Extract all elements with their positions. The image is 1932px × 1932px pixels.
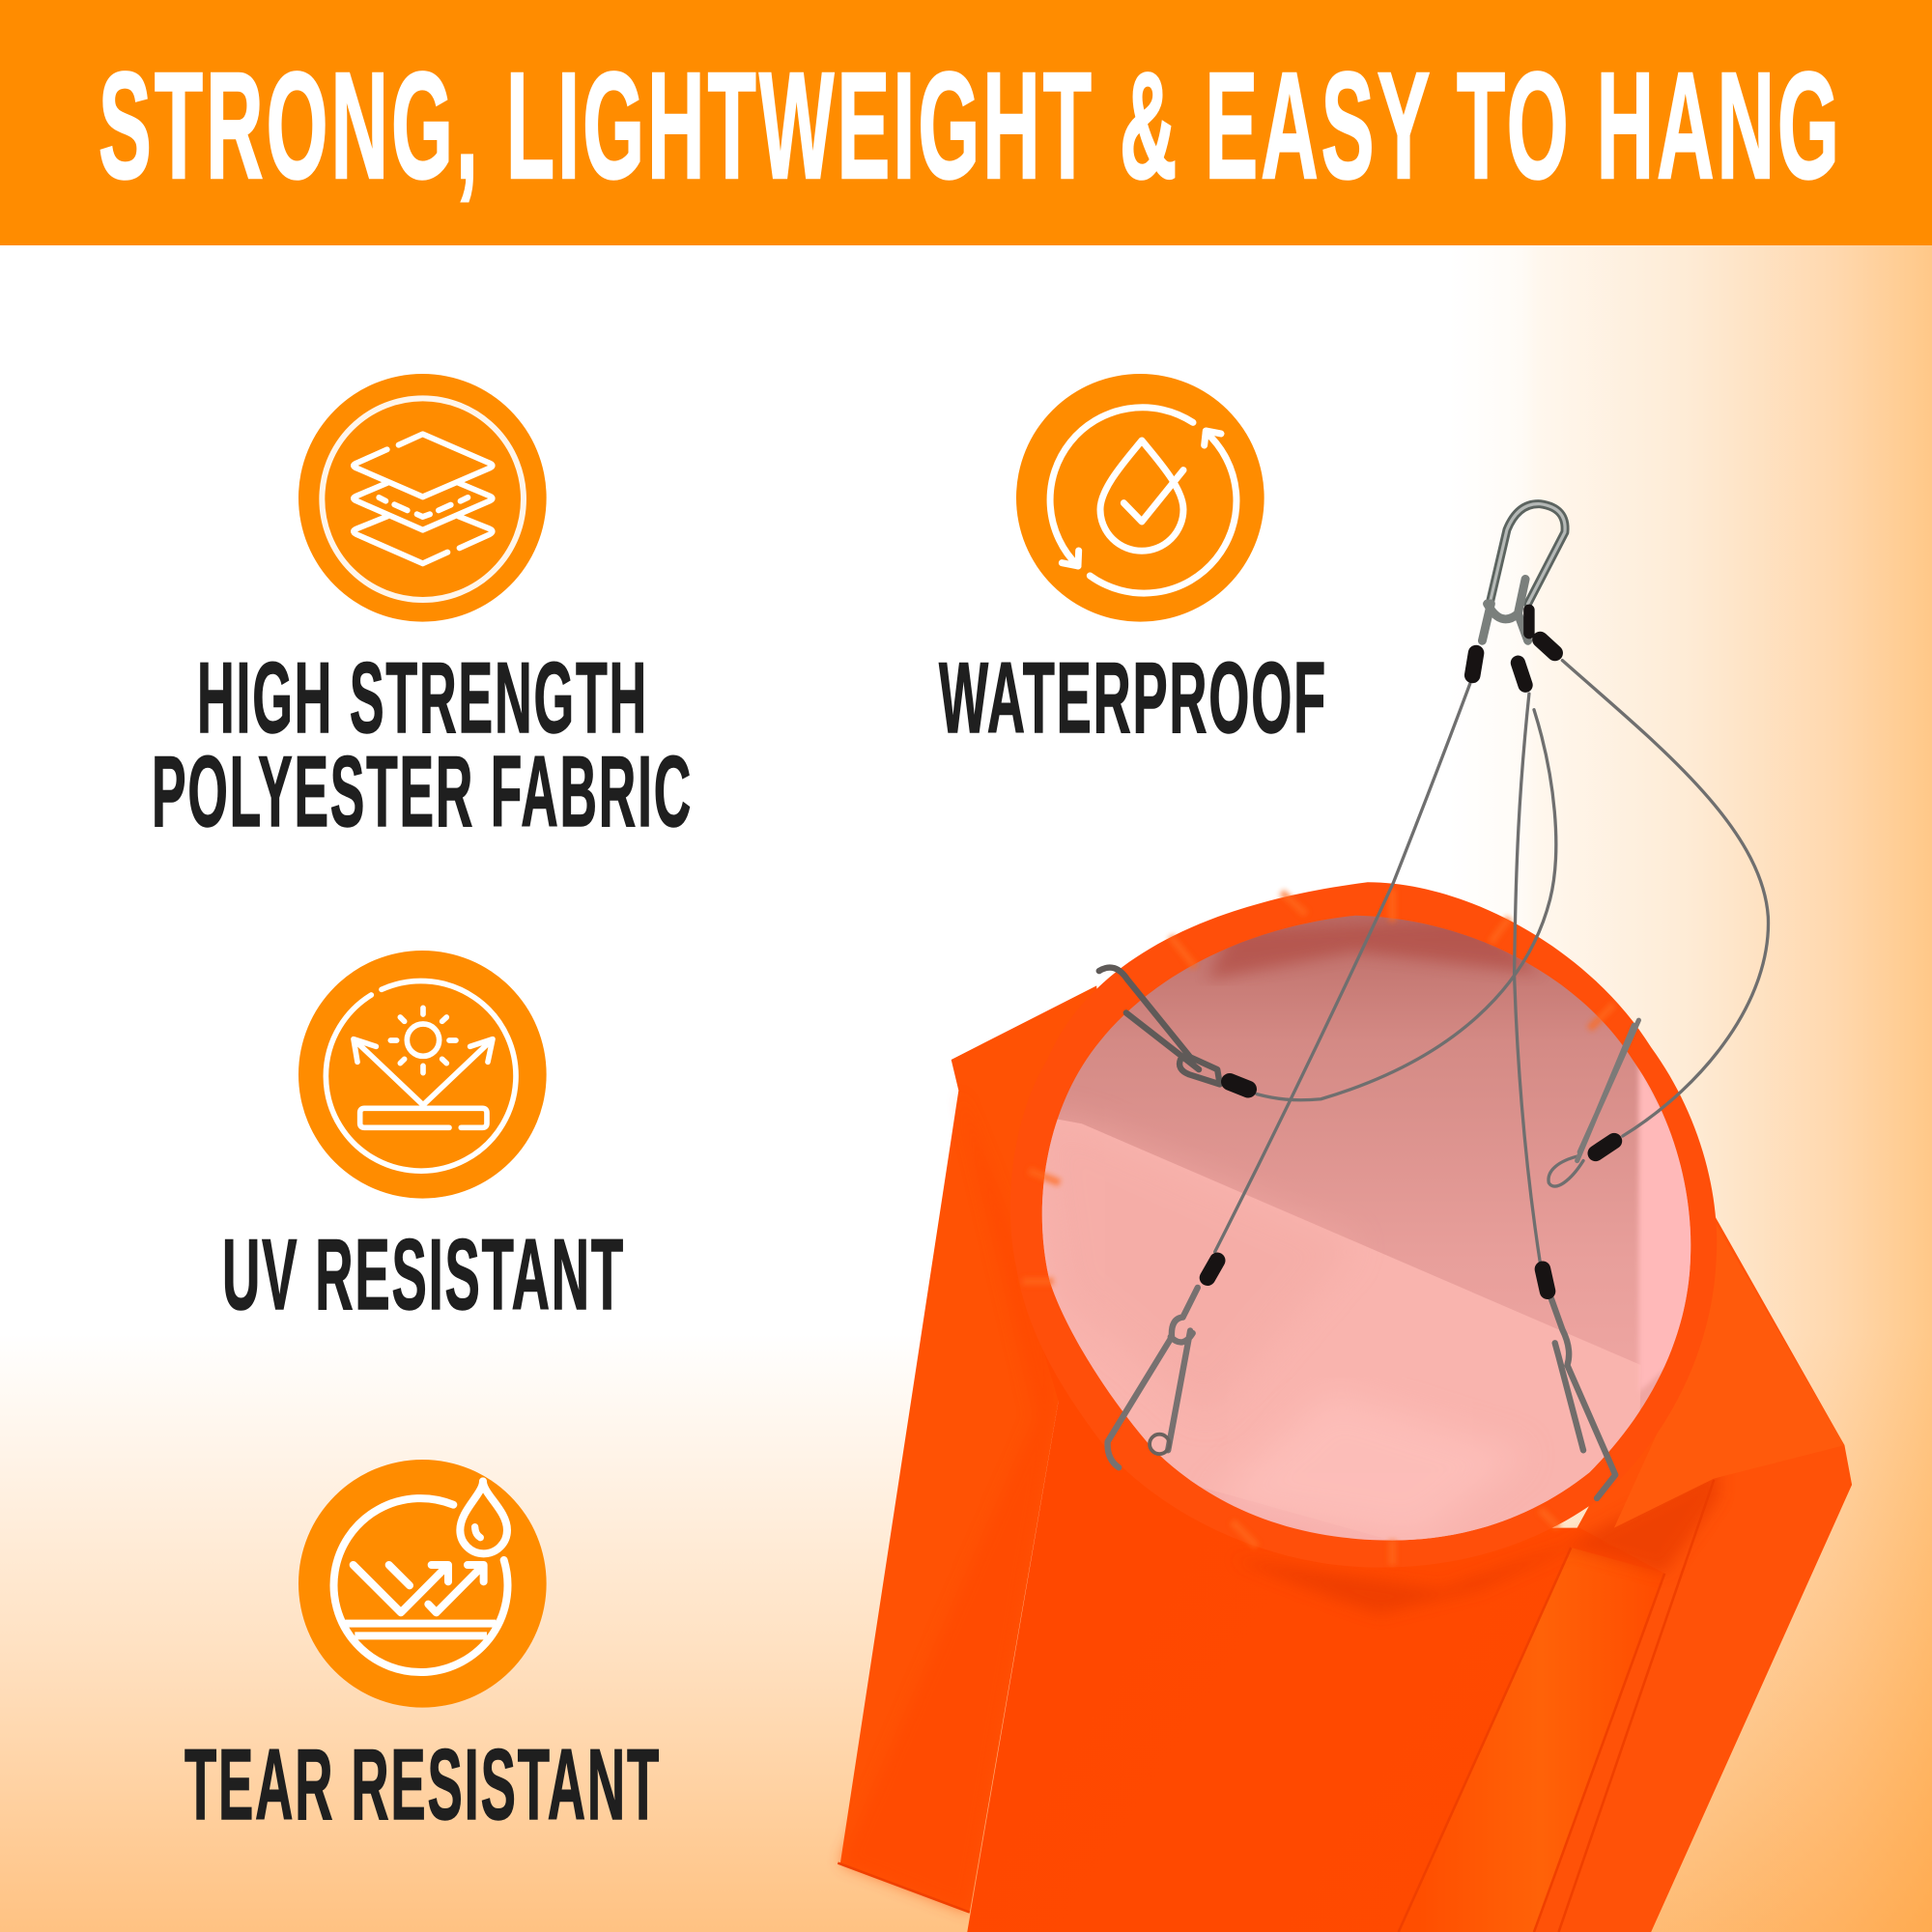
inner pink lining (1042, 916, 1690, 1541)
lower right clip (1551, 1298, 1615, 1498)
label: high strength polyester fabric (152, 642, 693, 848)
label: high strength polyester fabric: POLYESTER FABRIC (152, 736, 693, 848)
back left fabric panel (840, 985, 1122, 1913)
wire to lower left clip (1215, 684, 1470, 1252)
icon: tear resistant fabric (298, 1460, 547, 1708)
steel clips and carabiner (1099, 504, 1638, 1498)
upper left clip (1099, 968, 1220, 1084)
black crimps (1208, 610, 1614, 1292)
feature: tear resistant (185, 1460, 661, 1841)
carabiner outer (1490, 504, 1565, 604)
wire to upper left clip (1257, 710, 1556, 1100)
back right fabric panel (1405, 1202, 1852, 1932)
ring hem (1010, 882, 1717, 1568)
upper right flap highlight (1614, 1213, 1844, 1528)
wire hanger (1215, 661, 1769, 1263)
wire to lower right clip (1515, 694, 1540, 1263)
feature: uv resistant (222, 951, 625, 1331)
lining fold and shading (1035, 918, 1700, 1565)
right clip (1577, 1020, 1638, 1161)
carabiner highlight (1490, 504, 1565, 604)
header banner (0, 0, 1932, 245)
wire end loop (1548, 1155, 1583, 1186)
label: uv resistant: UV RESISTANT (222, 1219, 625, 1331)
lower left clip (1108, 1288, 1198, 1467)
left shaded fold (840, 1091, 1059, 1913)
icon: fabric layers (298, 374, 547, 622)
label: waterproof: WATERPROOF (939, 642, 1327, 754)
wire to right clip (1562, 661, 1769, 1136)
icon: water drop with check (1016, 374, 1264, 622)
icon: sun reflecting off surface (298, 951, 547, 1199)
feature: high strength polyester fabric (152, 374, 693, 848)
carabiner eyelet (1482, 579, 1528, 640)
label: high strength polyester fabric: HIGH STRENGTH (197, 642, 648, 754)
feature: waterproof (939, 374, 1327, 754)
fold crease lines (838, 1480, 1714, 1932)
panel: product photo of windsock with wire hanger (835, 499, 1853, 1932)
fold strip (1399, 1548, 1664, 1932)
label: tear resistant: TEAR RESISTANT (185, 1729, 661, 1841)
hem gather folds (1023, 890, 1614, 1565)
shadow under ring (1233, 1466, 1719, 1614)
front fabric panel (967, 1343, 1664, 1932)
